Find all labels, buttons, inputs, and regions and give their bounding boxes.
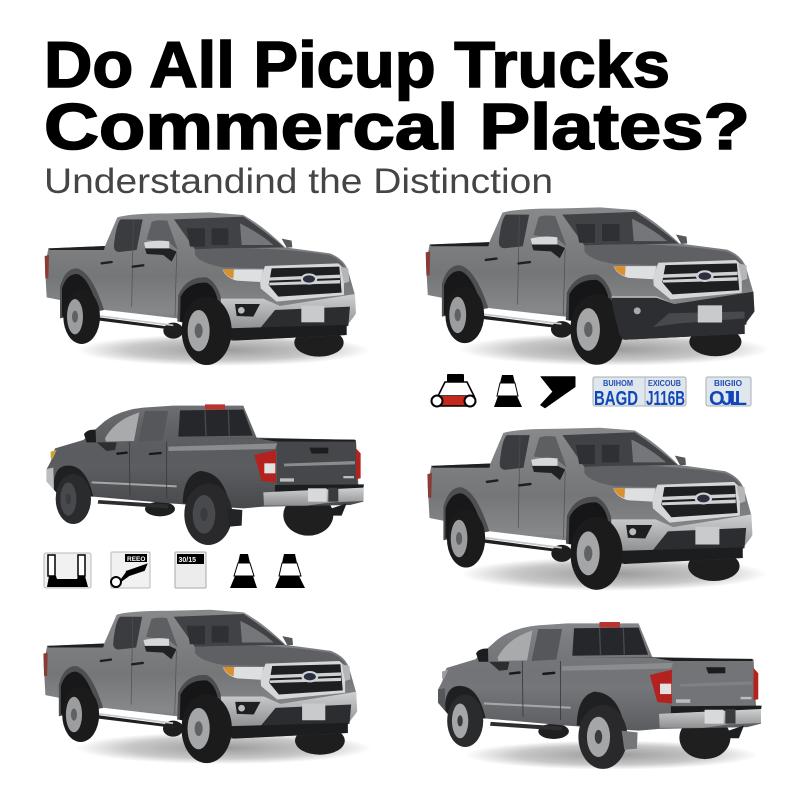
icon row: bed, hitch, plate, cones [44, 552, 305, 588]
title [44, 28, 750, 163]
truck: rear three-quarter, lighter, bottom right [438, 622, 762, 770]
truck: front three-quarter with dark bumper, top right [426, 207, 769, 366]
icon: tow hitch tag: REEO [127, 556, 145, 563]
license plate: single [706, 377, 751, 410]
icon: truck bed [44, 553, 91, 588]
icon row: truck accessories and plates [432, 374, 751, 410]
truck: front three-quarter, bottom left [43, 610, 371, 764]
license plate: double: BAGD [594, 388, 638, 410]
title: Commercal Plates? [44, 90, 750, 163]
license plate: double: J116B [646, 388, 685, 410]
title: Do All Picup Trucks [44, 28, 670, 101]
license plate: double: EXICOUB [648, 379, 681, 388]
icon: traffic cone [275, 554, 305, 588]
icon: traffic cone [230, 554, 257, 588]
icon: traffic cone [494, 375, 522, 407]
icon: plate tag: 30/15 [178, 557, 196, 564]
icon: tow hitch tag [111, 552, 150, 588]
subtitle: Understandind the Distinction [44, 162, 553, 201]
icon: plate tag [175, 552, 206, 588]
icon: hitch with battery [432, 374, 476, 406]
truck: rear three-quarter, middle left [47, 404, 364, 545]
license plate: double [593, 377, 686, 410]
license plate: single: BIIGIIO [714, 379, 742, 388]
license plate: double: BUIHOM [603, 379, 633, 388]
truck: front three-quarter, middle right [427, 428, 767, 591]
icon: angled bracket [541, 377, 575, 408]
license plate: single: OJI.L [709, 388, 747, 410]
truck: front three-quarter, top left [45, 212, 370, 366]
